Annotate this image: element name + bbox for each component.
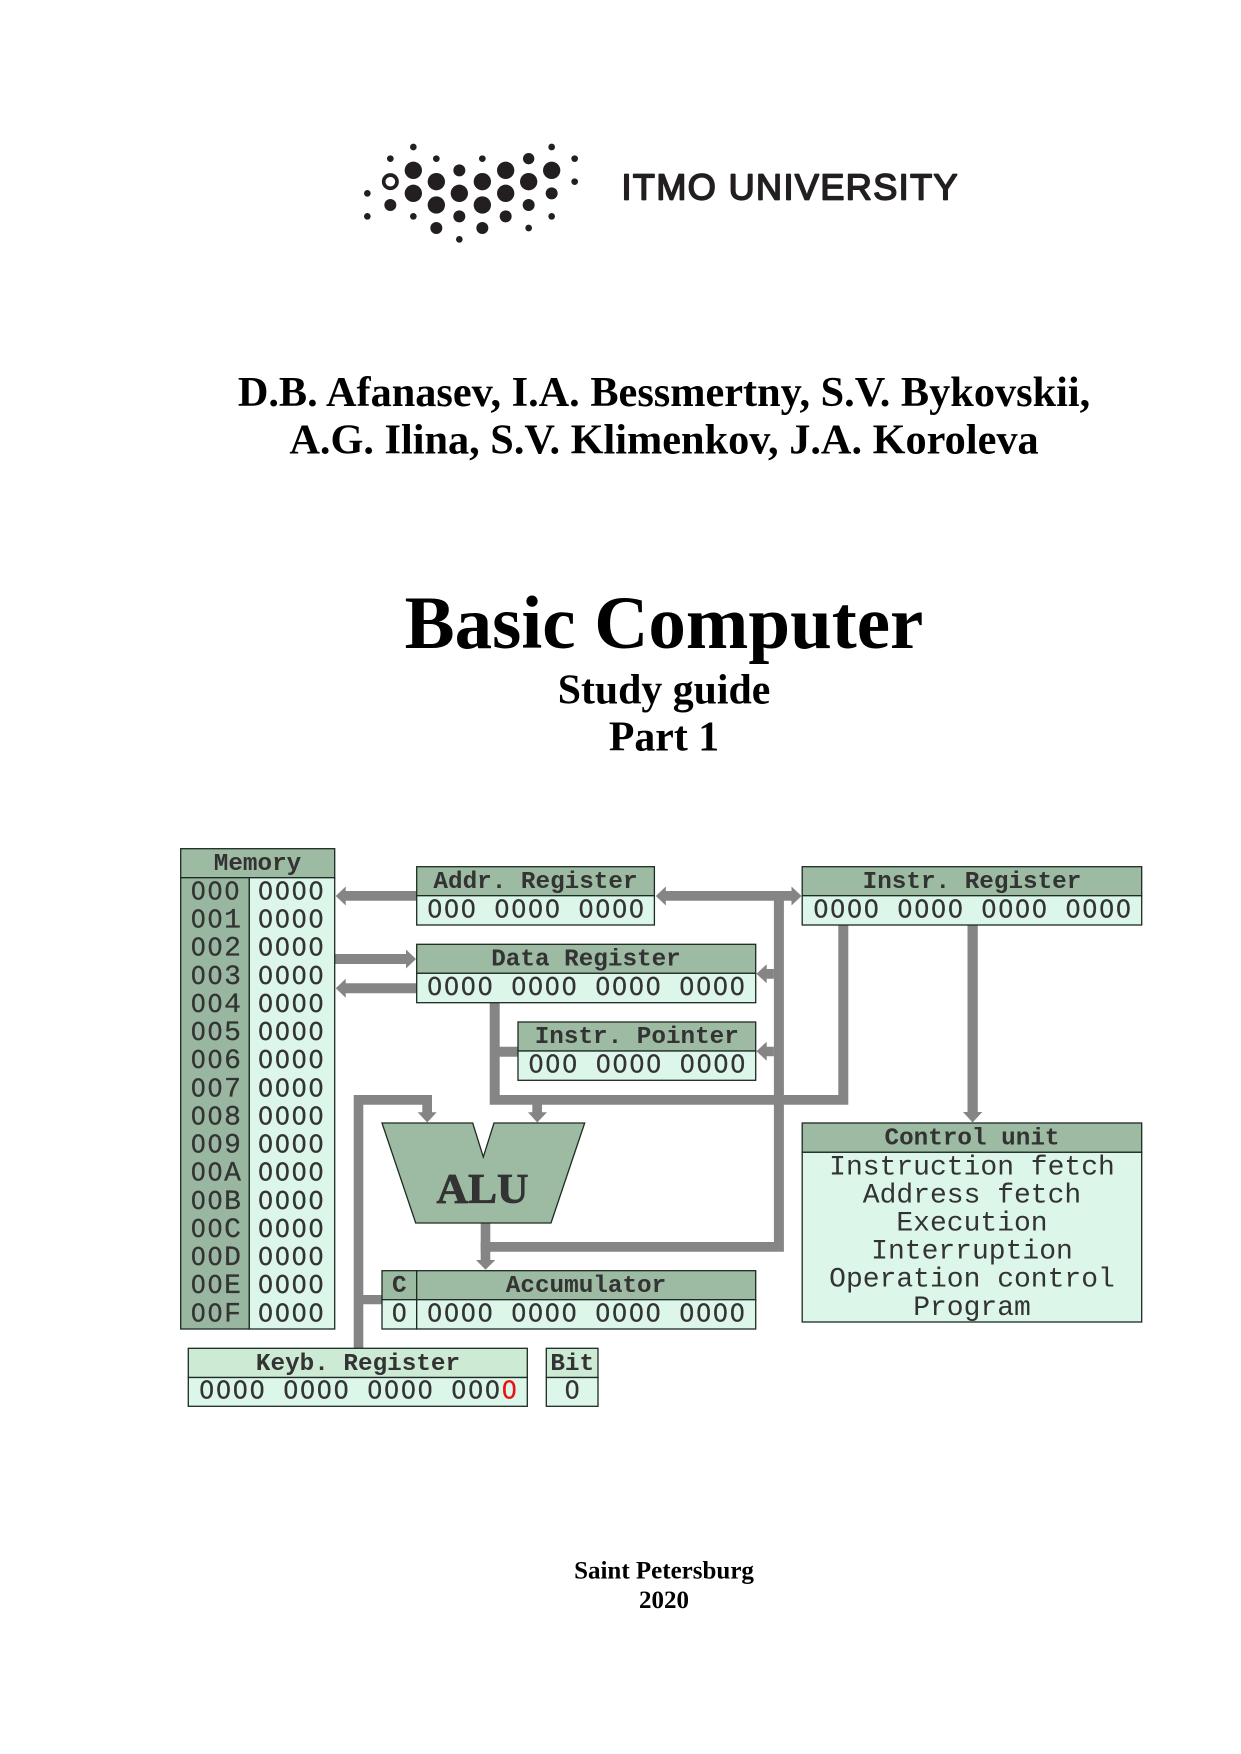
- arrow: data register to memory: [336, 979, 417, 998]
- panel: address register: 000 0000 0000: [427, 894, 645, 923]
- subtitle: Study guide: [558, 667, 770, 713]
- panel: memory: 0000: [258, 1102, 325, 1130]
- panel: memory: 009: [190, 1130, 241, 1162]
- panel: accumulator: Accumulator: [506, 1273, 666, 1300]
- title: Basic Computer: [405, 582, 923, 665]
- panel: address register: Addr. Register: [433, 869, 638, 896]
- arrow: bus to data register: [756, 964, 774, 983]
- arrow: instruction register to ALU bus: [490, 925, 848, 1105]
- panel: keyboard register: [188, 1348, 527, 1406]
- panel: bit flag: 0: [564, 1376, 581, 1405]
- panel: bit flag: Bit: [550, 1351, 594, 1378]
- panel: memory: 0000: [258, 961, 325, 990]
- panel: memory: 00B: [190, 1186, 241, 1218]
- panel: ALU: ALU: [436, 1167, 528, 1213]
- arrow: ALU output to accumulator: [476, 1223, 495, 1270]
- arrow: main bus and accumulator link: [481, 896, 784, 1252]
- panel: memory: 0000: [258, 1130, 325, 1159]
- subtitle: Part 1: [609, 714, 719, 760]
- arrow: bus to address and instruction registers: [656, 886, 802, 906]
- panel: accumulator: 0000 0000 0000 0000: [427, 1299, 746, 1328]
- diagram: basic computer architecture: [181, 849, 1142, 1406]
- panel: memory: 0000: [258, 905, 325, 934]
- panel: memory: [181, 849, 335, 1330]
- panel: data register: Data Register: [491, 946, 681, 974]
- arrow: instruction register to control unit: [963, 925, 982, 1122]
- panel: control unit: Execution: [896, 1208, 1048, 1240]
- panel: memory: 008: [190, 1102, 241, 1134]
- panel: instruction register: 0000 0000 0000 0000: [813, 894, 1132, 923]
- panel: instruction pointer: Instr. Pointer: [535, 1024, 739, 1051]
- panel: ALU: [382, 1123, 585, 1223]
- arrow: loop into ALU left input: [354, 1095, 437, 1348]
- authors: A.G. Ilina, S.V. Klimenkov, J.A. Koroleva: [289, 416, 1039, 463]
- panel: address register: [417, 867, 654, 925]
- panel: memory: 0000: [258, 1158, 325, 1187]
- panel: memory: 0000: [258, 876, 325, 906]
- panel: memory: 002: [190, 933, 241, 965]
- arrow: bus to instruction pointer: [756, 1042, 774, 1061]
- arrow: address register to memory: [336, 886, 417, 906]
- panel: memory: 0000: [258, 1045, 325, 1074]
- panel: accumulator: [382, 1271, 756, 1329]
- authors: [238, 369, 1090, 463]
- panel: accumulator: C: [392, 1273, 407, 1300]
- panel: instruction register: Instr. Register: [863, 869, 1081, 896]
- panel: memory: 0000: [258, 1186, 325, 1215]
- panel: control unit: Instruction fetch: [829, 1152, 1115, 1183]
- panel: memory: 003: [190, 961, 241, 993]
- panel: memory: 007: [190, 1073, 241, 1105]
- panel: memory: 00D: [190, 1242, 241, 1274]
- panel: memory: 00A: [190, 1158, 241, 1190]
- panel: bit flag: [546, 1348, 598, 1406]
- panel: control unit: [802, 1123, 1142, 1324]
- subtitle: [558, 667, 770, 760]
- arrow: memory to data register: [335, 950, 416, 968]
- panel: control unit: Control unit: [885, 1126, 1059, 1152]
- panel: memory: 00E: [190, 1270, 241, 1302]
- panel: control unit: Interruption: [871, 1237, 1073, 1268]
- panel: instruction register: [802, 867, 1142, 925]
- panel: control unit: Program: [913, 1293, 1031, 1324]
- panel: memory: 0000: [258, 1298, 325, 1327]
- icon: ITMO dot pattern: [364, 144, 578, 243]
- panel: control unit: Operation control: [829, 1265, 1115, 1296]
- panel: memory: 0000: [258, 1073, 325, 1102]
- authors: D.B. Afanasev, I.A. Bessmertny, S.V. Bykovskii,: [238, 369, 1090, 416]
- panel: memory: 0000: [258, 1270, 325, 1299]
- imprint: city and year: 2020: [639, 1587, 689, 1614]
- panel: accumulator: 0: [391, 1299, 408, 1328]
- panel: memory: 006: [190, 1045, 241, 1077]
- imprint: city and year: Saint Petersburg: [574, 1557, 754, 1584]
- panel: data register: [417, 944, 756, 1003]
- panel: memory: 0000: [258, 989, 325, 1018]
- panel: keyboard register: Keyb. Register: [256, 1351, 460, 1378]
- imprint: city and year: [574, 1557, 754, 1614]
- panel: memory: Memory: [214, 851, 302, 878]
- panel: memory: 0000: [258, 1017, 325, 1046]
- panel: memory: 0000: [258, 1242, 325, 1271]
- panel: memory: 005: [190, 1017, 241, 1049]
- panel: keyboard register: 0000 0000 0000 0000: [199, 1376, 518, 1405]
- panel: memory: 0000: [258, 933, 325, 962]
- panel: memory: 001: [190, 905, 241, 937]
- panel: memory: 004: [190, 989, 241, 1021]
- panel: memory: 00F: [190, 1298, 241, 1330]
- panel: memory: 0000: [258, 1214, 325, 1243]
- panel: instruction pointer: 000 0000 0000: [528, 1049, 747, 1078]
- logo wordmark: ITMO UNIVERSITY: [622, 167, 958, 208]
- panel: memory: 00C: [190, 1214, 241, 1246]
- arrow: bus into ALU right input: [528, 1100, 547, 1122]
- logo: ITMO University: [364, 144, 958, 243]
- panel: data register: 0000 0000 0000 0000: [427, 972, 746, 1001]
- panel: instruction pointer: [518, 1022, 756, 1080]
- data bus connectors: [335, 886, 982, 1348]
- panel: memory: 000: [190, 876, 241, 906]
- panel: control unit: Address fetch: [863, 1180, 1081, 1211]
